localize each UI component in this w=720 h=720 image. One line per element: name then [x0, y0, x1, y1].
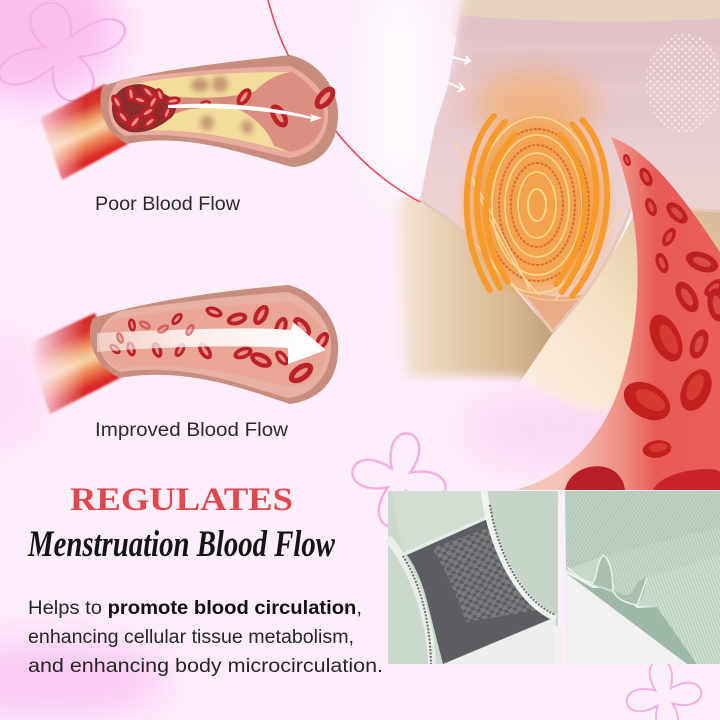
outer artery: [40, 84, 128, 180]
red connector line: [268, 0, 420, 202]
vessel wall: [90, 285, 338, 404]
faded cells under arrow: [115, 318, 197, 345]
body text: enhancing cellular tissue metabolism,: [28, 627, 354, 648]
decorative flower: bottom right: [622, 655, 706, 720]
label: poor blood flow: Poor Blood Flow: [95, 194, 240, 215]
waistband: [455, 26, 458, 38]
photo: folded waistband close-up: [565, 491, 720, 664]
decorative flower: top left: [0, 0, 143, 125]
skin torso: [440, 0, 720, 35]
heat arcs: [467, 116, 607, 296]
blood cells: [565, 153, 720, 490]
photo: body wearing shaping brief with heat rings: [395, 0, 720, 414]
heat wash: [475, 70, 595, 140]
gusset line: [525, 295, 582, 300]
lace arrows: [447, 56, 470, 92]
open chamber: [240, 72, 324, 152]
clustered cells: [109, 83, 339, 132]
mesh dots: [485, 129, 589, 281]
heading: menstruation blood flow: Menstruation Blood Flow: [27, 524, 335, 565]
body text: [28, 598, 383, 677]
body text: and enhancing body microcirculation.: [28, 656, 383, 677]
outer artery: [26, 313, 120, 414]
brief seam: [420, 200, 720, 332]
crossing light lines: [455, 140, 625, 300]
label: improved blood flow: Improved Blood Flow: [95, 420, 288, 441]
mesh panel: [646, 33, 720, 133]
body text: Helps to promote blood circulation ,: [28, 598, 362, 619]
brief fabric: [420, 38, 720, 297]
illustration: improved blood flow vessel: [26, 285, 338, 414]
decorative flower: middle: [343, 424, 455, 536]
heading: regulates: REGULATES: [70, 482, 293, 518]
illustration: poor blood flow vessel: [40, 55, 339, 180]
lumen: [100, 302, 327, 387]
clot cluster: [112, 84, 176, 132]
ribbed rows: [470, 52, 710, 82]
dark inner strip: [566, 573, 697, 664]
heat glow: [461, 109, 613, 301]
heat rings: [477, 117, 597, 293]
left thigh: [380, 195, 553, 382]
fold backing: [566, 527, 720, 664]
flow arrow: [168, 104, 322, 122]
vessel wall: [100, 55, 338, 167]
photo: gusset close-up: [388, 491, 562, 664]
blood cells: [107, 302, 332, 387]
illustration: enlarged blood vessel with cells: [515, 137, 720, 490]
flow arrow: [97, 322, 326, 364]
inner stripe: [99, 292, 331, 398]
narrowed channel: [165, 92, 254, 118]
fold edge highlight: [567, 555, 647, 605]
right thigh: [522, 210, 720, 414]
lower panel: [647, 555, 720, 664]
fold recesses: [593, 556, 613, 590]
gusset tint: [519, 286, 582, 330]
inner wall: [109, 66, 328, 158]
plaque spots: [191, 76, 253, 134]
plaque deposits: [130, 72, 324, 152]
